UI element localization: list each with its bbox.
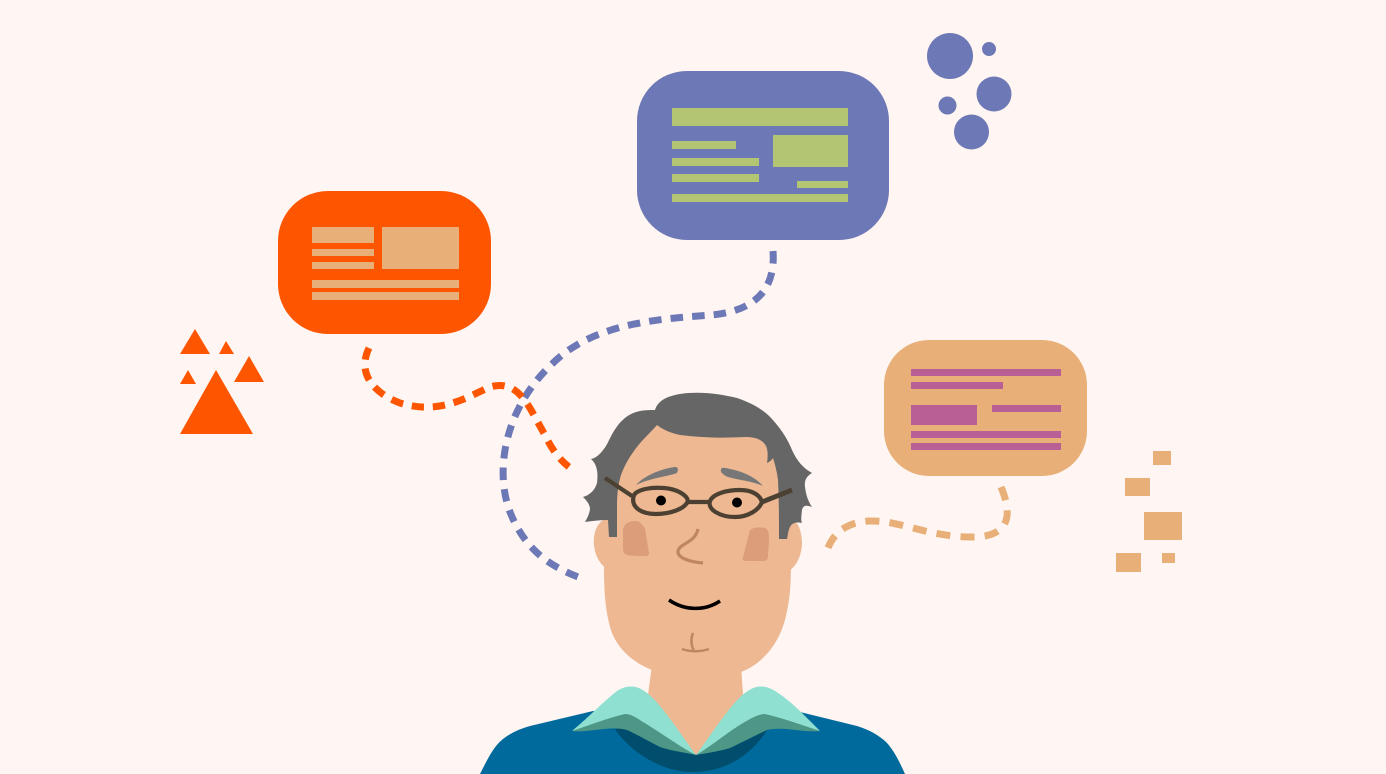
cheeks bbox=[623, 521, 769, 561]
panel: tan document bubble bbox=[884, 340, 1087, 476]
eyebrows bbox=[636, 467, 763, 486]
illustration: man with glasses bbox=[480, 393, 905, 774]
glasses bbox=[605, 478, 792, 517]
arrow: blue dashed thought line bbox=[503, 251, 773, 577]
panel: blue document bubble bbox=[637, 71, 889, 240]
arrow: tan dashed thought line bbox=[828, 487, 1007, 548]
icon: tan squares bbox=[1116, 451, 1182, 572]
chin mark bbox=[682, 633, 709, 651]
hair bbox=[583, 393, 812, 539]
panel: orange document bubble bbox=[278, 191, 491, 334]
icon: blue circles bbox=[927, 33, 1012, 150]
collar light bbox=[572, 687, 820, 755]
shirt bbox=[480, 711, 905, 774]
ears bbox=[594, 518, 802, 570]
icon: orange triangles bbox=[180, 329, 264, 434]
mouth bbox=[669, 600, 720, 608]
collar shadow bbox=[572, 714, 820, 755]
shirt neck shadow bbox=[615, 720, 767, 772]
eyes bbox=[656, 496, 742, 508]
nose bbox=[678, 529, 703, 563]
neck bbox=[648, 665, 743, 755]
face bbox=[604, 425, 791, 678]
arrow: orange dashed thought line bbox=[365, 348, 569, 467]
